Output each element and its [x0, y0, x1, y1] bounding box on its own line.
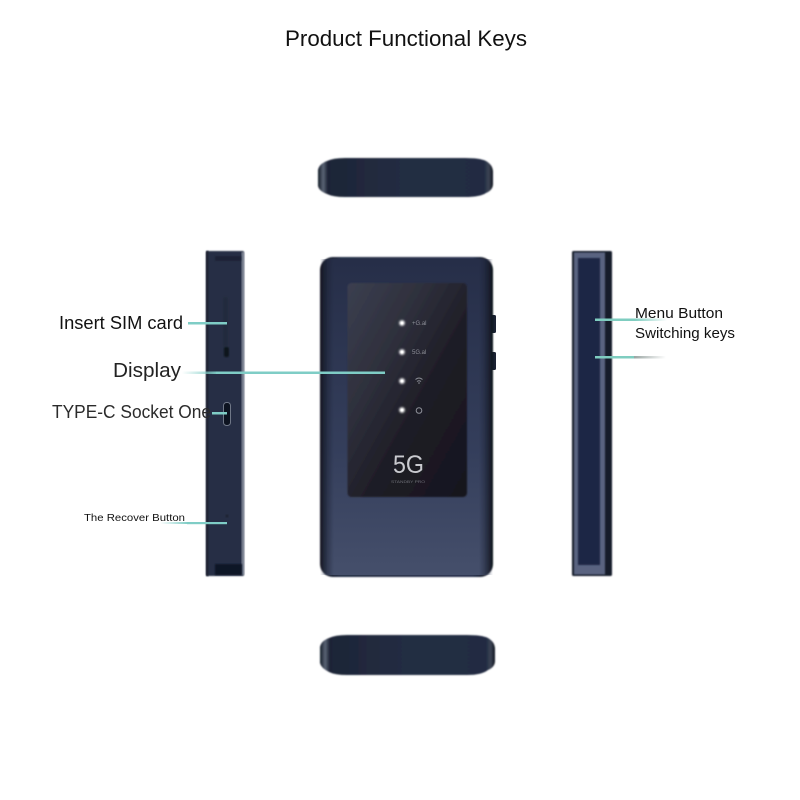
callout: The Recover Button: The Recover Button — [84, 512, 185, 524]
infographic canvas — [52, 30, 734, 676]
indicator lights: 5G.al — [412, 350, 426, 356]
callout: Switching keys — [595, 326, 735, 358]
recover button hole — [226, 514, 228, 518]
callout: Switching keys: Switching keys — [635, 326, 735, 342]
side keys — [491, 315, 496, 370]
TYPE-C socket — [224, 402, 230, 426]
callout: TYPE-C Socket One: TYPE-C Socket One — [52, 402, 211, 422]
callout: Insert SIM card: Insert SIM card — [59, 313, 183, 333]
callout: Display: Display — [113, 360, 181, 382]
indicator lights: +G.al — [412, 321, 427, 327]
5G logo: STANDBY PRO — [391, 479, 425, 484]
callout: Menu Button: Menu Button — [635, 306, 723, 322]
device: right side view — [572, 251, 612, 576]
5G logo: 5G — [393, 451, 424, 479]
device: bottom view — [320, 635, 495, 675]
device: top view — [318, 158, 493, 197]
indicator lights — [399, 320, 427, 413]
callout: Menu Button — [595, 306, 723, 322]
body — [320, 257, 493, 577]
device: left side view — [206, 251, 244, 576]
display panel — [348, 283, 467, 497]
SIM card slot — [223, 297, 229, 357]
title: Product Functional Keys — [285, 26, 527, 51]
device: front view — [320, 257, 496, 577]
